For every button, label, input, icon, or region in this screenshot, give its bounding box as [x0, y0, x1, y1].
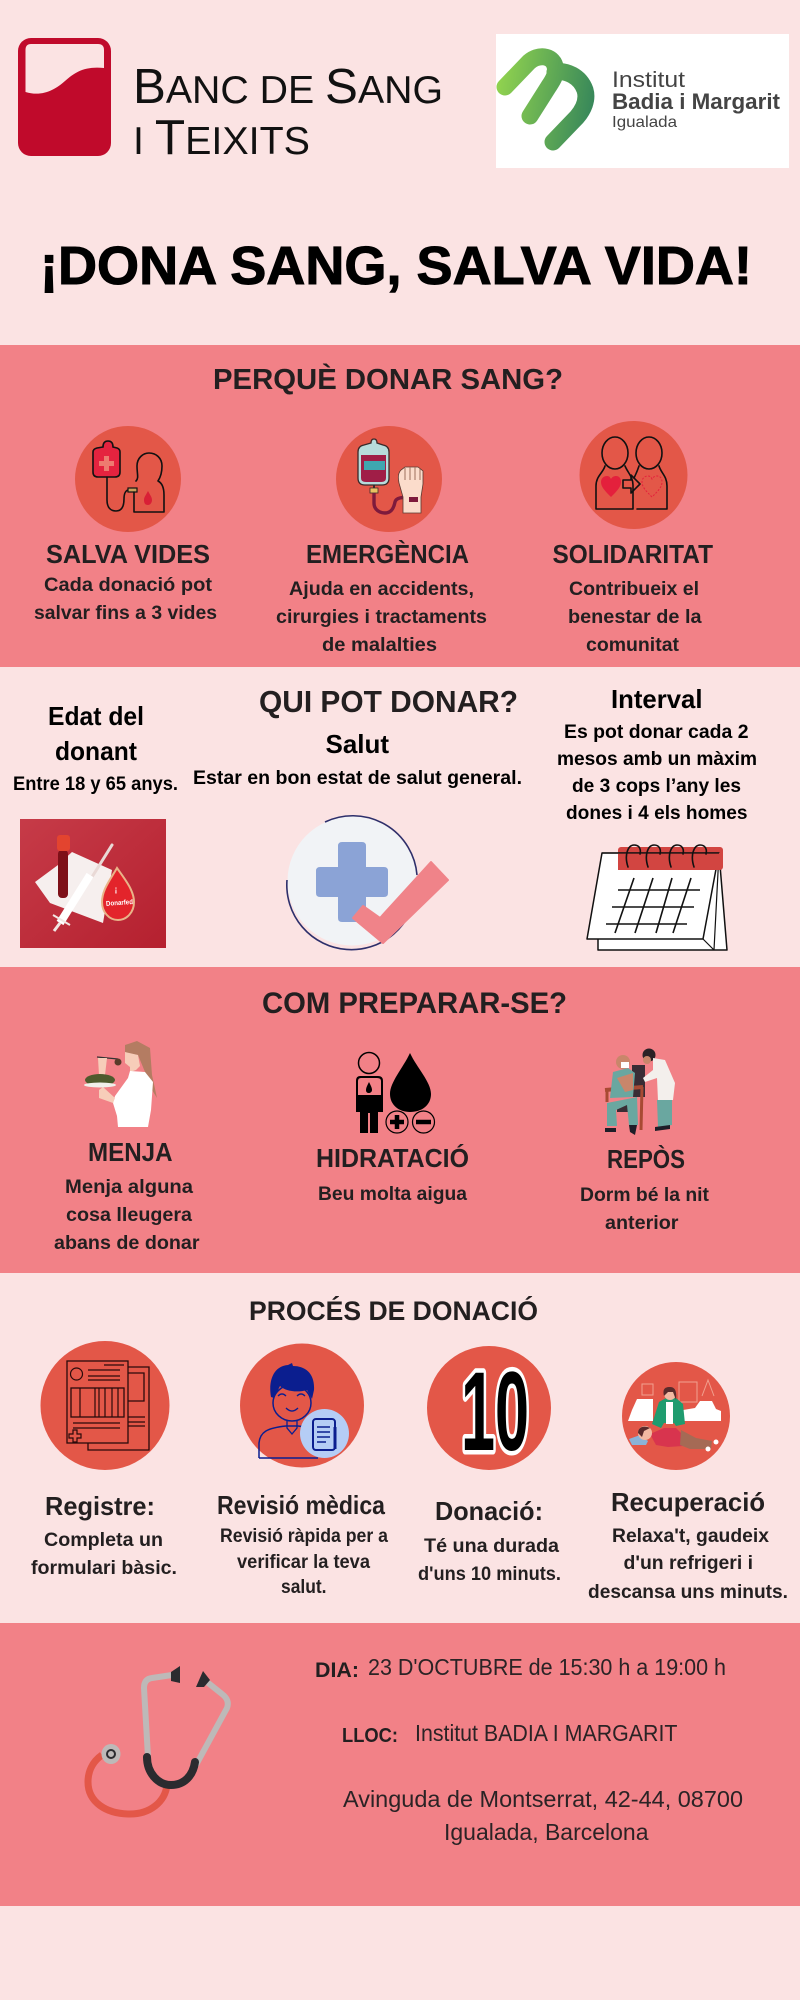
heading: hidratació: HIDRATACIÓ: [316, 1143, 469, 1173]
text: recuperació: [588, 1526, 788, 1603]
text: solidaritat: comunitat: [586, 635, 680, 656]
icon: number 10: 10: [461, 1349, 529, 1474]
text: solidaritat: benestar de la: [568, 607, 702, 628]
text: salut: Estar en bon estat de salut general.: [193, 768, 522, 789]
heading: revisió mèdica: Revisió mèdica: [217, 1490, 385, 1520]
icon: calendar: [587, 845, 727, 950]
text: salva vides: salvar fins a 3 vides: [34, 603, 217, 624]
text: lloc: Institut BADIA I MARGARIT: [415, 1720, 678, 1746]
panel: procés de donació: [31, 1295, 788, 1603]
card: menja: [54, 1041, 200, 1254]
text: interval: Es pot donar cada 2: [564, 722, 748, 743]
text: emergència: [276, 579, 487, 656]
icon: forms: [40, 1341, 170, 1470]
heading: qui pot donar: QUI POT DONAR?: [259, 684, 518, 719]
text: interval: [557, 722, 757, 824]
text: donació: [418, 1536, 561, 1585]
header logos and title: [18, 34, 789, 296]
text: emergència: de malalties: [322, 635, 437, 656]
text: menja: Menja alguna: [65, 1177, 193, 1198]
text: interval: mesos amb un màxim: [557, 749, 757, 770]
text: repòs: anterior: [605, 1213, 679, 1234]
text: emergència: cirurgies i tractaments: [276, 607, 487, 628]
text: emergència: Ajuda en accidents,: [289, 579, 474, 600]
heading: interval: Interval: [611, 684, 702, 714]
icon: patient and doctor: [605, 1048, 675, 1135]
card: repòs: [580, 1048, 710, 1234]
heading: donació: Donació:: [435, 1496, 543, 1526]
text: recuperació: descansa uns minuts.: [588, 1582, 788, 1603]
text: adreça: Igualada, Barcelona: [444, 1819, 649, 1845]
heading: recuperació: Recuperació: [611, 1487, 765, 1517]
heading: salva vides: SALVA VIDES: [46, 539, 210, 569]
card: solidaritat: [552, 421, 713, 656]
image: blood tube, syringe and drop: Donarfed: [106, 899, 133, 908]
text: menja: [54, 1177, 200, 1254]
icon: number 10: [427, 1346, 551, 1474]
heading: procés de donació: PROCÉS DE DONACIÓ: [249, 1295, 538, 1326]
logo: Banc de Sang i Teixits: [18, 38, 443, 165]
text: registre: Completa un: [44, 1530, 163, 1551]
card: edat del donant: [13, 701, 178, 948]
card: interval: [557, 684, 757, 950]
image: blood tube, syringe and drop: ¡: [115, 885, 117, 894]
panel: qui pot donar: [13, 684, 757, 950]
panel: com preparar-se: [0, 967, 800, 1273]
text: menja: abans de donar: [54, 1233, 200, 1254]
text: salva vides: [34, 575, 217, 624]
text: adreça: Avinguda de Montserrat, 42-44, 08700: [343, 1786, 743, 1812]
card: salut: [193, 729, 522, 950]
card: registre: [31, 1341, 177, 1579]
icon: blood bag and fist: [336, 426, 442, 532]
heading: edat del donant: donant: [55, 736, 137, 766]
text: donació: d'uns 10 minuts.: [418, 1564, 561, 1585]
logo: Institut Badia i Margarit: Institut: [612, 67, 685, 92]
icon: two people sharing a heart: [580, 421, 688, 529]
heading: solidaritat: SOLIDARITAT: [552, 539, 713, 569]
icon: first aid scene: [622, 1362, 730, 1470]
text: donació: Té una durada: [424, 1536, 559, 1557]
card: hidratació: [316, 1052, 469, 1205]
text: edat del donant: Entre 18 y 65 anys.: [13, 774, 178, 795]
heading: com preparar-se: COM PREPARAR-SE?: [262, 987, 567, 1020]
icon: doctor with document: [240, 1344, 364, 1468]
panel: perquè donar sang: [0, 345, 800, 667]
icon: medical cross with check mark: [287, 816, 448, 950]
text: menja: cosa lleugera: [66, 1205, 192, 1226]
logo: Banc de Sang i Teixits: I TEIXITS: [133, 111, 310, 165]
text: lloc: LLOC:: [342, 1725, 398, 1747]
icon: person and water balance drop: [356, 1052, 434, 1133]
text: solidaritat: [568, 579, 702, 656]
card: salva vides: [34, 426, 217, 624]
text: recuperació: Relaxa't, gaudeix: [612, 1526, 769, 1547]
text: dia: 23 D'OCTUBRE de 15:30 h a 19:00 h: [368, 1654, 726, 1680]
text: repòs: [580, 1185, 710, 1234]
text: revisió mèdica: salut.: [281, 1577, 326, 1598]
panel: dia i lloc: [0, 1623, 800, 1906]
text: interval: de 3 cops l’any les: [572, 776, 741, 797]
icon: woman eating: [84, 1041, 157, 1127]
heading: registre: Registre:: [45, 1491, 155, 1521]
text: dia: DIA:: [315, 1659, 359, 1682]
text: revisió mèdica: [220, 1526, 388, 1598]
title: ¡DONA SANG, SALVA VIDA!: [40, 236, 752, 296]
heading: perquè donar sang: PERQUÈ DONAR SANG?: [213, 362, 563, 396]
text: solidaritat: Contribueix el: [569, 579, 699, 600]
card: donació: [418, 1346, 561, 1585]
heading: repòs: REPÒS: [607, 1144, 685, 1174]
heading: menja: MENJA: [88, 1137, 173, 1167]
text: adreça: [343, 1786, 743, 1845]
heading: salut: Salut: [326, 729, 389, 759]
logo: Banc de Sang i Teixits: BANC DE SANG: [133, 60, 443, 114]
text: registre: formulari bàsic.: [31, 1558, 177, 1579]
text: revisió mèdica: Revisió ràpida per a: [220, 1526, 388, 1547]
text: registre: [31, 1530, 177, 1579]
text: repòs: Dorm bé la nit: [580, 1185, 710, 1206]
logo: Institut Badia i Margarit: [496, 34, 789, 168]
card: revisió mèdica: [217, 1344, 388, 1598]
logo: Institut Badia i Margarit: Badia i Margarit: [612, 89, 781, 114]
card: recuperació: [588, 1362, 788, 1603]
icon: stethoscope: [88, 1666, 228, 1814]
heading: edat del donant: [48, 701, 144, 766]
heading: edat del donant: Edat del: [48, 701, 144, 731]
logo: Institut Badia i Margarit: Igualada: [612, 114, 677, 131]
text: revisió mèdica: verificar la teva: [237, 1552, 370, 1573]
heading: emergència: EMERGÈNCIA: [306, 539, 469, 569]
image: blood tube, syringe and drop: [20, 819, 166, 948]
text: interval: dones i 4 els homes: [566, 803, 748, 824]
text: recuperació: d'un refrigeri i: [624, 1553, 753, 1574]
text: salva vides: Cada donació pot: [44, 575, 213, 596]
card: emergència: [276, 426, 487, 656]
icon: blood bag and person: [75, 426, 181, 532]
text: hidratació: Beu molta aigua: [318, 1184, 467, 1205]
